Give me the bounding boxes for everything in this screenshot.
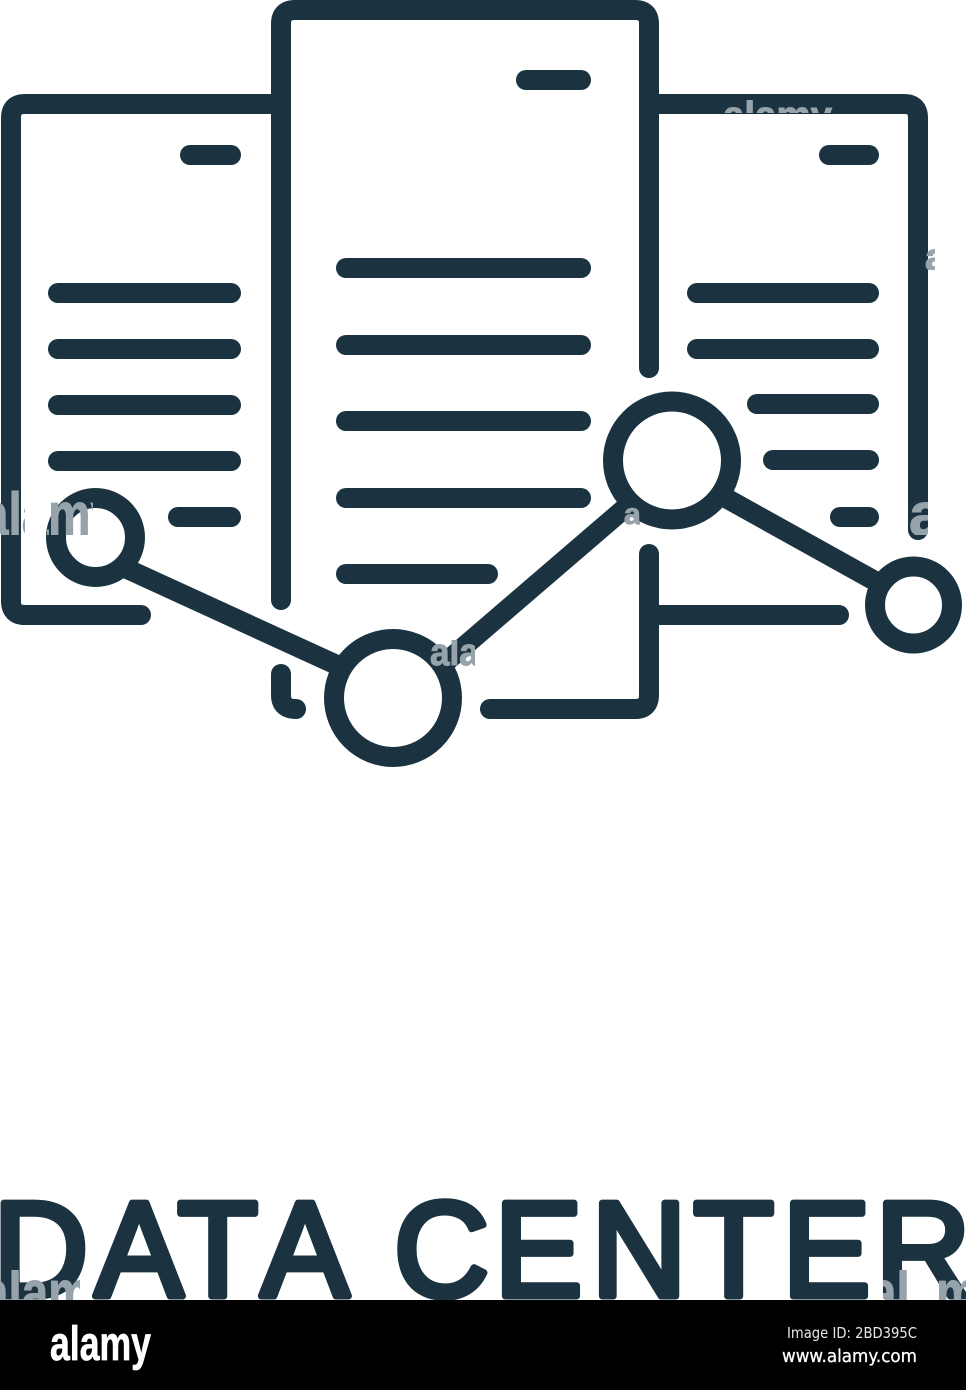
footer logo: alamy: [50, 1318, 151, 1371]
icon: data center servers with line chart: [11, 10, 952, 757]
chart connector lines: [125, 497, 884, 667]
watermark fragment: chart line: alam: [430, 632, 510, 674]
watermark fragment: top right: alamy: [723, 95, 832, 137]
chart node 3: [613, 402, 731, 520]
right server bottom line: [655, 605, 839, 625]
center server lower left fragment: [281, 674, 296, 709]
footer bar: [0, 1300, 966, 1390]
chart node 1: [56, 498, 135, 577]
image id: Image ID: 2BD395C: [787, 1324, 917, 1342]
center server lower right fragment: [490, 554, 649, 709]
website url: www.alamy.com: [782, 1346, 917, 1367]
right server side cap: [908, 500, 928, 530]
watermark fragment: right edge: a: [925, 237, 947, 279]
chart node 4: [875, 566, 952, 644]
right server text lines: [697, 155, 869, 517]
center server text lines: [346, 80, 581, 574]
left server bottom cap: [120, 605, 141, 625]
title: DATA CENTER: [0, 1174, 966, 1325]
right server outline: [659, 104, 918, 530]
watermark fragment: node three: a: [624, 498, 641, 531]
center server outline: [281, 10, 649, 600]
watermark fragment: right server side: a: [909, 481, 943, 548]
chart node 2: [334, 639, 452, 757]
left server text lines: [58, 155, 231, 517]
left server outline: [11, 104, 271, 615]
